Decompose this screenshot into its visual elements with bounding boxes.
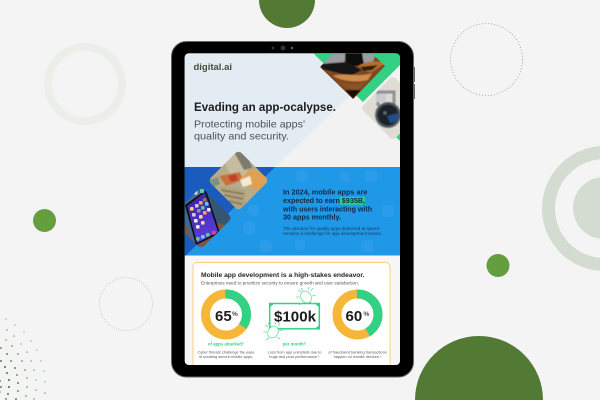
heading: Evading an app-ocalypse. xyxy=(194,100,336,114)
card xyxy=(193,262,390,372)
stat label: of apps attacked: of apps attacked† xyxy=(208,342,245,346)
phone app icons xyxy=(190,198,216,241)
statement text xyxy=(282,188,372,222)
statement text: In 2024, mobile apps are xyxy=(283,188,368,196)
tablet camera xyxy=(272,46,293,50)
subheading: quality and security. xyxy=(194,130,289,142)
screen xyxy=(184,53,400,365)
tablet side buttons xyxy=(413,67,415,99)
caption: app uninstalls xyxy=(268,350,321,359)
stat: $100k with bugs xyxy=(263,287,320,340)
icon: bug top xyxy=(296,287,316,305)
tablet bezel xyxy=(172,42,414,377)
statement small text: remains a challenge for app development teams. xyxy=(283,231,382,236)
photo: smartphone in hand xyxy=(184,188,230,248)
statement text: with users interacting with xyxy=(282,204,372,214)
decoration: top-right dotted circle xyxy=(450,24,522,96)
decoration: left green dot xyxy=(33,209,56,232)
decoration: top green circle xyxy=(259,0,315,28)
donut chart: 60% xyxy=(337,294,378,335)
statement small text: The demand for quality apps delivered at speed xyxy=(283,226,380,231)
blue band xyxy=(184,167,401,256)
card subtitle: Enterprises need to prioritize security to ensure growth and user satisfaction. xyxy=(201,280,359,286)
caption: fraudulent transactions xyxy=(328,350,387,359)
statement text: expected to earn $935B, xyxy=(283,196,365,205)
stat: $100k with bugs: $100k xyxy=(274,308,317,326)
tablet xyxy=(171,41,415,378)
donut chart: 60%: 60 xyxy=(346,308,362,325)
caption: app uninstalls: Loss from app uninstalls due to xyxy=(268,350,321,354)
caption: cyber threats xyxy=(197,350,255,359)
donut chart: 65%: % xyxy=(232,311,238,318)
stat label: per month: per month† xyxy=(283,342,307,346)
decoration: halftone dots xyxy=(0,318,46,400)
faint app icons xyxy=(243,170,394,252)
statement text: 30 apps monthly. xyxy=(283,212,341,222)
decoration: concentric rings right xyxy=(548,152,600,264)
decoration: pale ring xyxy=(48,47,122,121)
decoration: bottom green semicircle xyxy=(415,336,543,400)
donut chart: 60%: % xyxy=(364,311,370,318)
photo: padlock xyxy=(362,77,400,139)
donut chart: 65% xyxy=(206,294,246,335)
caption: app uninstalls: bugs and poor performance.* xyxy=(269,354,320,359)
donut chart: 65%: 65 xyxy=(215,308,232,325)
decoration: left dotted circle xyxy=(100,278,152,330)
logo: digital.ai: digital.ai xyxy=(194,62,232,72)
caption: cyber threats: of creating secure mobile apps. xyxy=(199,354,253,359)
icon: bug bottom xyxy=(263,322,283,340)
bottom white section xyxy=(184,256,401,366)
subheading: Protecting mobile apps' xyxy=(194,118,305,130)
caption: cyber threats: Cyber threats challenge the ease xyxy=(197,350,255,354)
highlight: $935B xyxy=(340,197,365,205)
photo: banknotes xyxy=(210,152,268,210)
decoration: right green dot xyxy=(486,254,510,277)
card title: Mobile app development is a high-stakes endeavor. xyxy=(201,272,365,279)
screen text xyxy=(194,62,387,359)
green accent shapes xyxy=(313,53,401,142)
statement small text xyxy=(283,226,382,236)
caption: fraudulent transactions: happen on mobile devices.* xyxy=(334,354,382,359)
photo: hands holding phone xyxy=(320,53,385,99)
subheading xyxy=(194,118,305,142)
caption: fraudulent transactions: of fraudulent banking transactions xyxy=(328,350,387,354)
screen: hero background xyxy=(184,53,401,168)
